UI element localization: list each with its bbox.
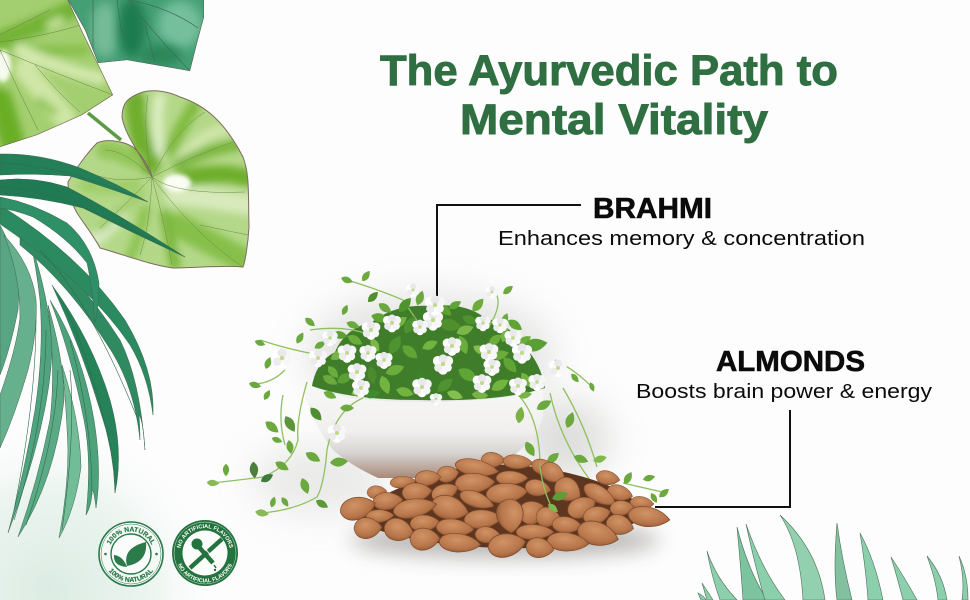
- connector: brahmi: [437, 205, 581, 296]
- brahmi plant: [206, 269, 671, 518]
- bowl: [303, 386, 544, 478]
- callout: brahmi: BRAHMI: [593, 193, 712, 225]
- tendril over almonds: [540, 467, 569, 514]
- leaf: large light green center: [68, 90, 250, 268]
- flowers: [272, 283, 567, 443]
- callout: brahmi: [498, 193, 865, 250]
- palm frond: [0, 154, 185, 538]
- leaf stem: [88, 113, 121, 140]
- badge: 100% natural: 100% NATURAL: [106, 526, 154, 545]
- badge: no artificial flavors: NO ARTIFICIAL FLAVORS: [176, 524, 234, 548]
- leaf: dark green top: [68, 0, 204, 71]
- badge: 100% natural: [98, 521, 164, 587]
- title: Mental Vitality: [460, 96, 768, 144]
- callout: almonds: [636, 346, 932, 403]
- connector: almonds: [655, 410, 790, 507]
- badge: no artificial flavors: [172, 520, 238, 586]
- tendrils: [212, 280, 667, 513]
- title: The Ayurvedic Path to: [380, 47, 838, 95]
- almond pile shadow: [350, 522, 660, 558]
- almond pile: [338, 452, 671, 560]
- callout: almonds: Boosts brain power & energy: [636, 381, 932, 403]
- small leaves: [206, 269, 671, 518]
- leaf: light green top left: [0, 0, 120, 150]
- plant and bowl shadow: [250, 293, 610, 515]
- callout: brahmi: Enhances memory & concentration: [498, 228, 865, 250]
- foliage leaves: [321, 372, 339, 388]
- callout: almonds: ALMONDS: [716, 346, 865, 378]
- palm grass bottom right: [698, 515, 968, 600]
- badge: 100% natural: 100% NATURAL: [108, 568, 154, 582]
- title: [380, 47, 838, 144]
- badge: no artificial flavors: NO ARTIFICIAL FLAVORS: [178, 563, 232, 582]
- foliage mass: [312, 305, 545, 400]
